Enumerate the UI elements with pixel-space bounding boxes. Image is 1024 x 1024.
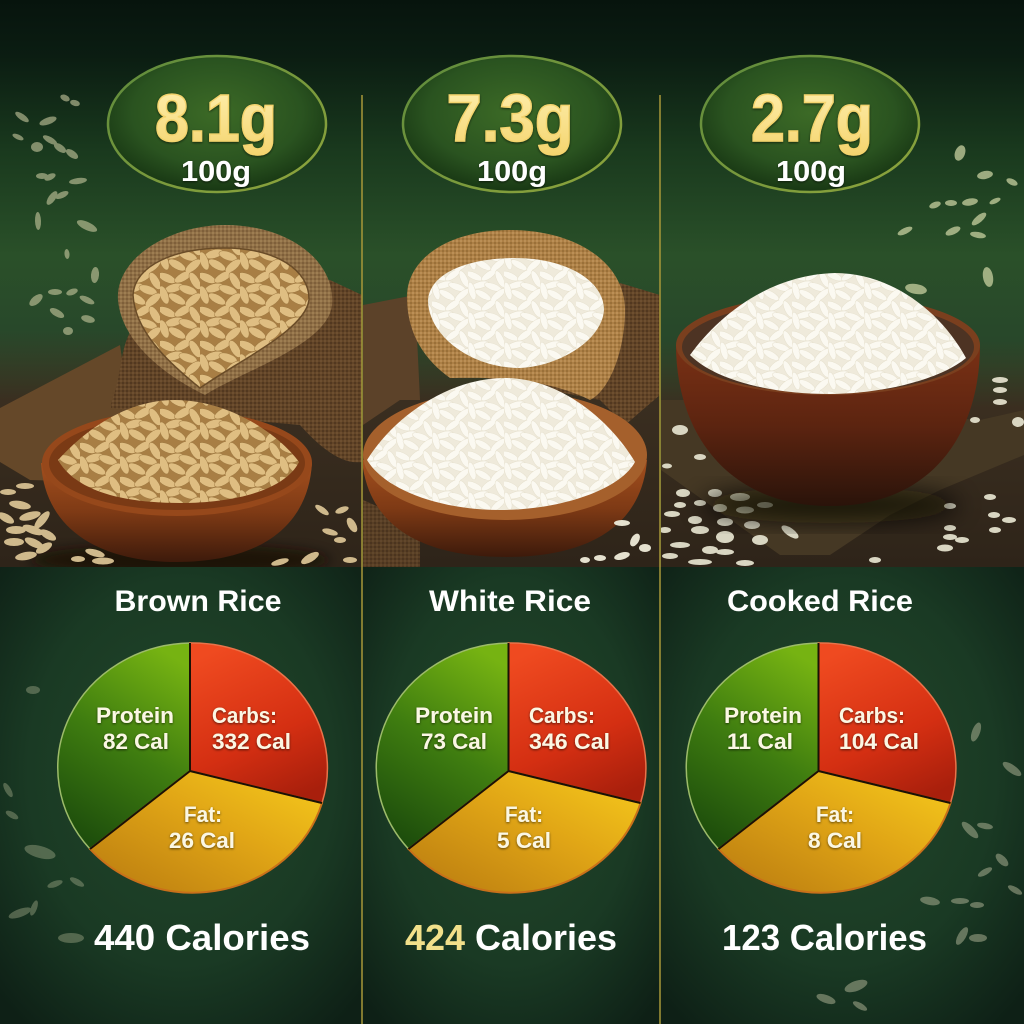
- pie labels: brown rice: Protein: [96, 703, 174, 728]
- protein badge: white rice: 100g: [477, 156, 547, 188]
- pie labels: brown rice: 82 Cal: [103, 729, 169, 754]
- floating grains: [896, 144, 1019, 296]
- pie labels: brown rice: Carbs:: [212, 703, 277, 728]
- pie labels: white rice: 346 Cal: [529, 729, 610, 754]
- scattered grains: [659, 377, 1024, 566]
- table surface: [0, 361, 361, 567]
- pie labels: white rice: 73 Cal: [421, 729, 487, 754]
- panel: white rice photo: [362, 230, 660, 567]
- panel: brown rice photo: [0, 93, 362, 576]
- divider: right: [659, 95, 661, 1024]
- table surface: [661, 370, 1024, 567]
- pie labels: cooked rice: 8 Cal: [808, 828, 862, 853]
- protein badge: brown rice: [108, 56, 326, 192]
- bowl shadow: [700, 487, 960, 523]
- protein badge: cooked rice: 100g: [776, 156, 846, 188]
- pie labels: cooked rice: Carbs:: [839, 703, 905, 728]
- heading: cooked rice: Cooked Rice: [727, 585, 913, 618]
- floating grains: lower right: [815, 721, 1023, 1013]
- pie labels: white rice: Carbs:: [529, 703, 595, 728]
- floating grains: [12, 93, 100, 335]
- sack: [407, 230, 660, 425]
- pie labels: cooked rice: Fat:: [816, 802, 854, 827]
- pie labels: white rice: Protein: [415, 703, 493, 728]
- pie labels: white rice: 5 Cal: [497, 828, 551, 853]
- pie chart: white rice: [376, 643, 646, 893]
- burlap cloth: [661, 400, 1024, 555]
- total calories: cooked rice: 123 Calories: [722, 917, 927, 958]
- protein badge: brown rice: 8.1g: [155, 81, 277, 156]
- bowl of white rice: [362, 378, 647, 557]
- total calories: white rice: 424 Calories: [405, 917, 617, 958]
- scattered grains: [580, 520, 651, 563]
- pie labels: cooked rice: 11 Cal: [727, 729, 793, 754]
- protein badge: cooked rice: 2.7g: [751, 81, 873, 156]
- pie labels: brown rice: 332 Cal: [212, 729, 291, 754]
- bowl of brown rice: [41, 400, 312, 562]
- divider: left: [361, 95, 363, 1024]
- pie chart: cooked rice: [686, 643, 956, 893]
- pie labels: white rice: Fat:: [505, 802, 543, 827]
- total calories: brown rice: 440 Calories: [94, 917, 310, 958]
- burlap cloth: [0, 345, 127, 480]
- heading: brown rice: Brown Rice: [114, 585, 282, 618]
- pie labels: cooked rice: 104 Cal: [839, 729, 919, 754]
- pie labels: cooked rice: [724, 703, 919, 853]
- scattered grains: [0, 483, 359, 567]
- protein badge: brown rice: 100g: [181, 156, 251, 188]
- pie labels: brown rice: 26 Cal: [169, 828, 235, 853]
- pie labels: brown rice: [96, 703, 291, 853]
- panel: cooked rice photo: [659, 144, 1024, 567]
- protein badge: cooked rice: [701, 56, 919, 192]
- bowl of cooked rice: [676, 273, 980, 506]
- table surface: [363, 361, 659, 567]
- pie labels: cooked rice: Protein: [724, 703, 802, 728]
- bowl shadow: [30, 542, 330, 567]
- pie chart: brown rice: [58, 643, 327, 893]
- floating grains: lower left: [1, 686, 85, 943]
- pie labels: brown rice: Fat:: [184, 802, 222, 827]
- pie labels: white rice: [415, 703, 610, 853]
- sack: [111, 225, 362, 462]
- protein badge: white rice: 7.3g: [446, 81, 574, 156]
- heading: white rice: White Rice: [429, 585, 591, 618]
- burlap cloth: [363, 295, 420, 425]
- protein badge: white rice: [403, 56, 621, 192]
